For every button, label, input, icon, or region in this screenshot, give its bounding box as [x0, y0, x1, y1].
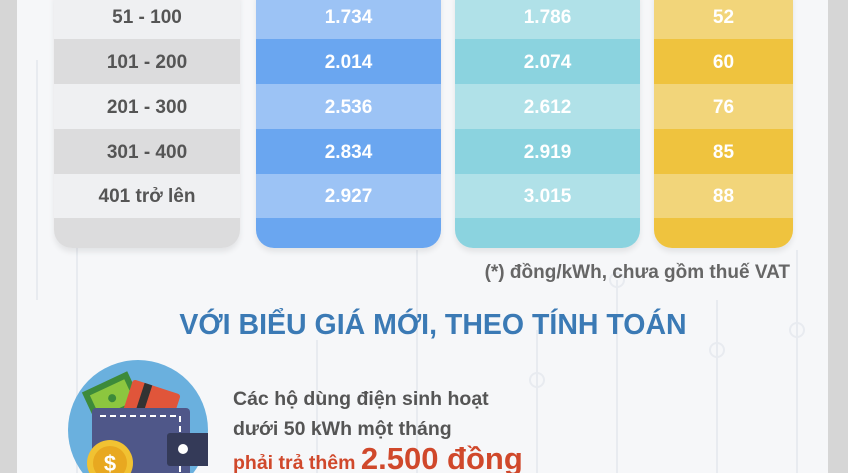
column: old price	[256, 0, 441, 248]
column: increase: 76	[713, 96, 734, 118]
column: new price: 2.919	[524, 142, 571, 162]
column: new price: 1.786	[524, 6, 571, 28]
column: old price: 2.536	[325, 96, 372, 118]
column: increase	[654, 0, 793, 248]
column: new price: 2.612	[524, 96, 571, 118]
text block: summary	[233, 388, 523, 473]
column: new price	[455, 0, 640, 248]
column: old price: 2.014	[325, 52, 372, 72]
column: increase: 60	[713, 52, 734, 72]
column: increase: 52	[713, 6, 734, 28]
column: increase: 85	[713, 142, 734, 162]
icon: wallet	[68, 360, 208, 473]
column: new price: 2.074	[524, 52, 571, 72]
column: kWh ranges: 401 trở lên	[99, 186, 195, 207]
column: kWh ranges: 301 - 400	[107, 142, 187, 162]
column: new price: 3.015	[524, 186, 571, 207]
column: kWh ranges: 201 - 300	[107, 96, 187, 118]
text block: summary: Các hộ dùng điện sinh hoạt	[233, 388, 489, 410]
column: old price: 2.927	[325, 186, 372, 207]
column: kWh ranges: 101 - 200	[107, 52, 187, 72]
column: increase: 88	[713, 186, 734, 207]
column: kWh ranges	[54, 0, 240, 248]
column: old price: 2.834	[325, 142, 372, 162]
footnote: (*) đồng/kWh, chưa gồm thuế VAT	[485, 262, 790, 283]
text block: summary: dưới 50 kWh một tháng	[233, 418, 452, 440]
column: kWh ranges: 51 - 100	[112, 6, 182, 28]
column: old price: 1.734	[325, 6, 372, 28]
heading: VỚI BIỂU GIÁ MỚI, THEO TÍNH TOÁN	[179, 309, 687, 341]
